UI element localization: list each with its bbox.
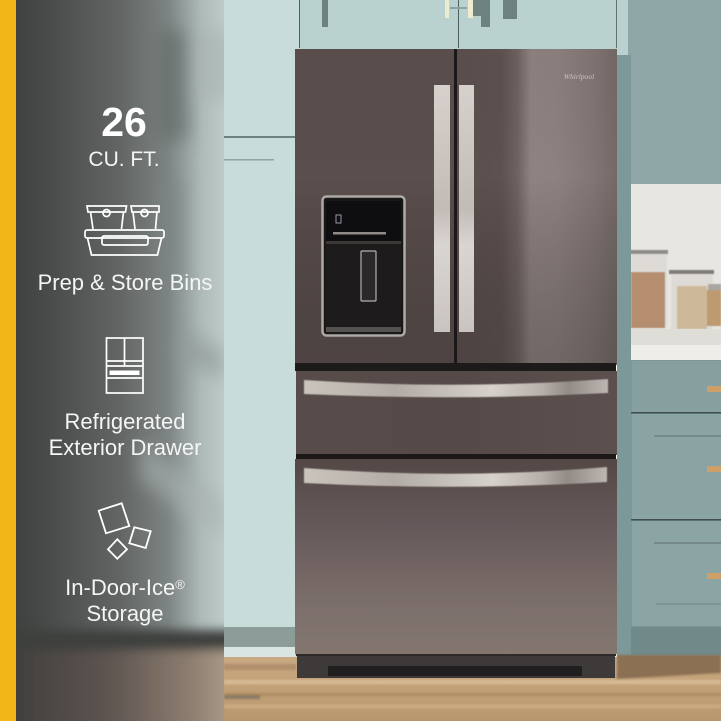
right column <box>617 55 631 663</box>
icon: ice cubes <box>98 502 152 560</box>
canisters <box>630 250 721 330</box>
capacity unit: CU. FT. <box>88 148 160 171</box>
upper cabinet above refrigerator <box>299 0 628 55</box>
backsplash <box>630 184 721 334</box>
refrigerator <box>295 49 617 678</box>
left wall cabinets <box>224 0 299 660</box>
label: in-door-ice storage: In-Door-Ice® <box>65 575 185 600</box>
icon: four-door refrigerator <box>106 337 144 394</box>
right door <box>457 49 617 365</box>
yellow accent bar <box>0 0 16 721</box>
base grille <box>297 653 615 678</box>
water and ice dispenser <box>322 196 404 336</box>
left door handle <box>434 85 450 332</box>
right door handle <box>459 85 474 332</box>
capacity number: 26 <box>101 99 147 145</box>
upper drawer <box>296 371 617 455</box>
countertop <box>630 329 721 360</box>
lower cabinets <box>631 360 721 657</box>
wood floor <box>224 655 721 721</box>
label: refrigerated exterior drawer: Refrigerated <box>64 409 186 434</box>
left door <box>295 49 454 365</box>
label: refrigerated exterior drawer <box>49 409 202 460</box>
label: in-door-ice storage <box>65 575 185 626</box>
lower drawer handle <box>304 467 607 487</box>
icon: food storage bins <box>84 205 165 256</box>
label: refrigerated exterior drawer: Exterior Drawer <box>49 435 201 460</box>
lower drawer <box>295 459 617 654</box>
upper drawer handle <box>304 379 608 397</box>
right upper cabinet <box>628 0 721 184</box>
label: in-door-ice storage: Storage <box>86 601 164 626</box>
brand logo: Whirlpool <box>564 72 594 81</box>
label: prep and store bins: Prep & Store Bins <box>38 270 212 295</box>
blurred left panel backdrop <box>16 0 224 721</box>
